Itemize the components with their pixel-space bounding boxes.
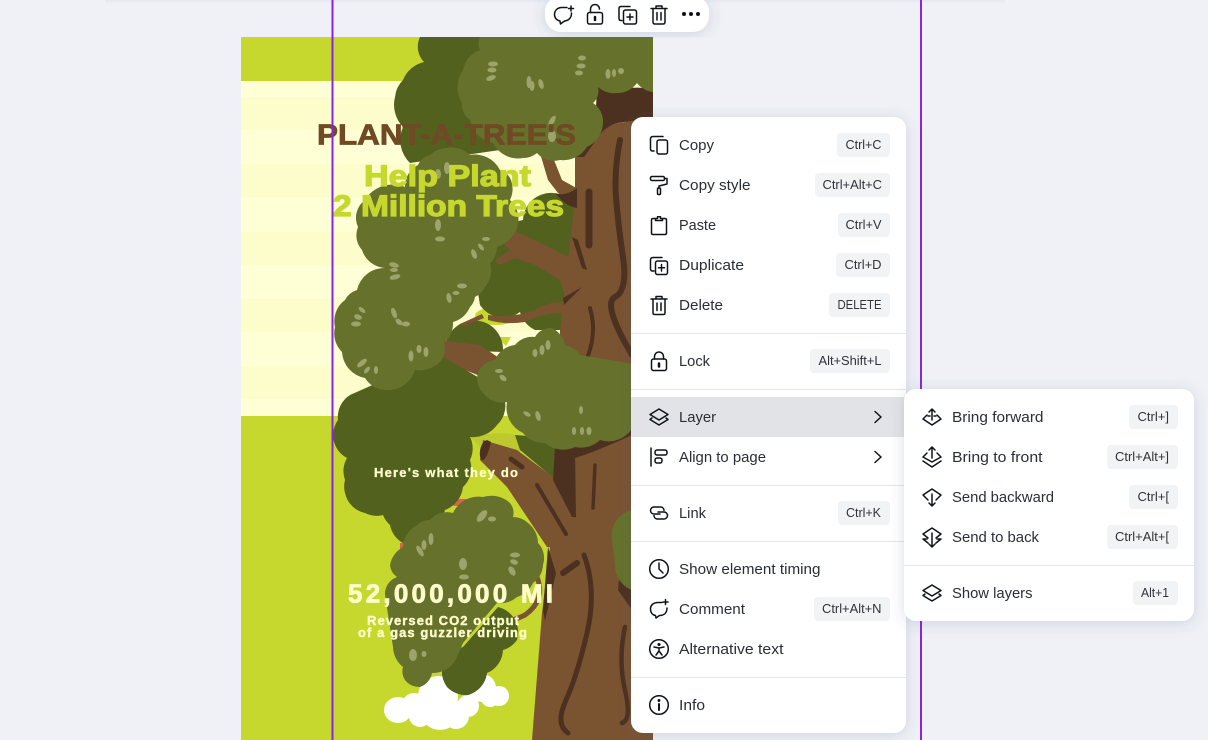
icon: more: [682, 12, 700, 16]
item: info: [650, 696, 705, 714]
layer submenu: [904, 389, 1194, 621]
item: copy style: [650, 173, 890, 197]
poster statistic: 52,000,000 MI: [348, 578, 553, 608]
brown ring: [513, 576, 542, 621]
item: lock: [652, 349, 890, 373]
dark trunk wedges: [543, 237, 632, 621]
right purple guide: [920, 0, 922, 740]
light foliage: right edge: [612, 510, 631, 590]
item: link: Link: [679, 506, 707, 522]
item: delete: Delete: [679, 298, 723, 314]
item: copy style: Copy style: [679, 178, 750, 194]
menu separators: [631, 334, 906, 678]
item: align to page: [651, 448, 881, 466]
item: duplicate: Ctrl+D: [844, 258, 882, 272]
item: copy: Ctrl+C: [846, 138, 882, 152]
item: paste: [652, 213, 890, 237]
poster title: PLANT-A-TREE'S: [317, 120, 576, 152]
item: comment: [650, 597, 890, 621]
item: delete: DELETE: [838, 298, 882, 312]
item: send to back: Send to back: [952, 530, 1040, 546]
left purple guide: [332, 0, 334, 740]
icon: unlock: [588, 4, 602, 24]
item: show layers: Show layers: [952, 586, 1032, 602]
item: alternative text: [650, 640, 784, 658]
item: layer: [650, 409, 881, 426]
dark foliage over cloud: [442, 673, 487, 696]
item: paste: Paste: [679, 218, 716, 234]
item: info: Info: [679, 698, 705, 714]
header shadow: [105, 0, 1005, 4]
item: layer: Layer: [679, 410, 716, 426]
branches: [443, 156, 575, 548]
item: comment: Ctrl+Alt+N: [822, 602, 882, 616]
icon: trash: [651, 6, 667, 24]
light foliage: right canopy: [477, 328, 631, 450]
item: copy style: Ctrl+Alt+C: [822, 178, 882, 192]
item: send backward: Send backward: [952, 490, 1054, 506]
item: comment: Comment: [679, 602, 745, 618]
dark foliage above lower branch: [445, 320, 503, 352]
submenu separator: [904, 564, 1194, 566]
light foliage: middle canopy: [334, 148, 519, 390]
light foliage: top canopy: [458, 37, 653, 161]
item: send backward: [923, 485, 1178, 509]
leaf highlights: [351, 56, 624, 661]
dark foliage: lower canopy: [333, 355, 505, 543]
poster statistic caption: Reversed CO2 output: [367, 613, 520, 628]
background bands: [241, 37, 653, 740]
item: duplicate: [650, 253, 890, 277]
item: show element timing: [650, 560, 820, 578]
item: alternative text: Alternative text: [679, 642, 784, 658]
poster statistic caption: of a gas guzzler driving: [358, 625, 527, 640]
item: send backward: Ctrl+[: [1138, 490, 1170, 504]
poster heading: 2 Million Trees: [333, 190, 564, 223]
dark foliage behind branches: [477, 193, 580, 330]
layer row highlight: [631, 397, 906, 437]
icon: add comment: [554, 6, 574, 24]
item: paste: Ctrl+V: [846, 218, 882, 232]
item: bring forward: [923, 405, 1178, 429]
item: bring to front: Ctrl+Alt+]: [1115, 450, 1169, 464]
item: link: Ctrl+K: [846, 506, 882, 520]
floating toolbar: [545, 0, 709, 32]
item: send to back: [923, 525, 1178, 549]
item: show element timing: Show element timing: [679, 562, 820, 578]
dark trunk shadow: [576, 87, 653, 157]
item: copy: Copy: [679, 138, 715, 154]
dark foliage beside big branch: [515, 435, 556, 480]
item: show layers: [923, 581, 1178, 605]
icon: duplicate: [619, 6, 636, 24]
light foliage: lower canopy: [385, 496, 544, 687]
dark branch cap: [480, 440, 491, 460]
item: lock: Alt+Shift+L: [818, 354, 882, 368]
item: duplicate: Duplicate: [679, 258, 744, 274]
dark foliage: bottom: [442, 607, 518, 695]
design canvas: tree poster: [241, 37, 653, 740]
item: bring to front: Bring to front: [952, 450, 1042, 466]
red accents: [400, 499, 468, 549]
dark branch underside: [555, 188, 577, 208]
poster heading: Help Plant: [364, 160, 531, 193]
trunk bark streaks: [511, 140, 632, 733]
item: show layers: Alt+1: [1141, 586, 1169, 600]
item: bring to front: [923, 445, 1178, 469]
tree trunk: [532, 88, 653, 740]
item: bring forward: Ctrl+]: [1138, 410, 1169, 424]
dark foliage: top canopy: [394, 37, 498, 163]
item: link: [650, 501, 890, 525]
poster statistic caption: [358, 613, 527, 640]
item: send to back: Ctrl+Alt+[: [1115, 530, 1170, 544]
poster subheading: Here's what they do: [374, 465, 518, 480]
item: lock: Lock: [679, 354, 711, 370]
poster heading: [334, 164, 564, 217]
item: align to page: Align to page: [679, 450, 766, 466]
item: bring forward: Bring forward: [952, 410, 1044, 426]
item: copy: [650, 133, 890, 157]
context menu: [631, 117, 906, 733]
item: delete: [651, 293, 890, 317]
white cloud: [384, 674, 509, 730]
